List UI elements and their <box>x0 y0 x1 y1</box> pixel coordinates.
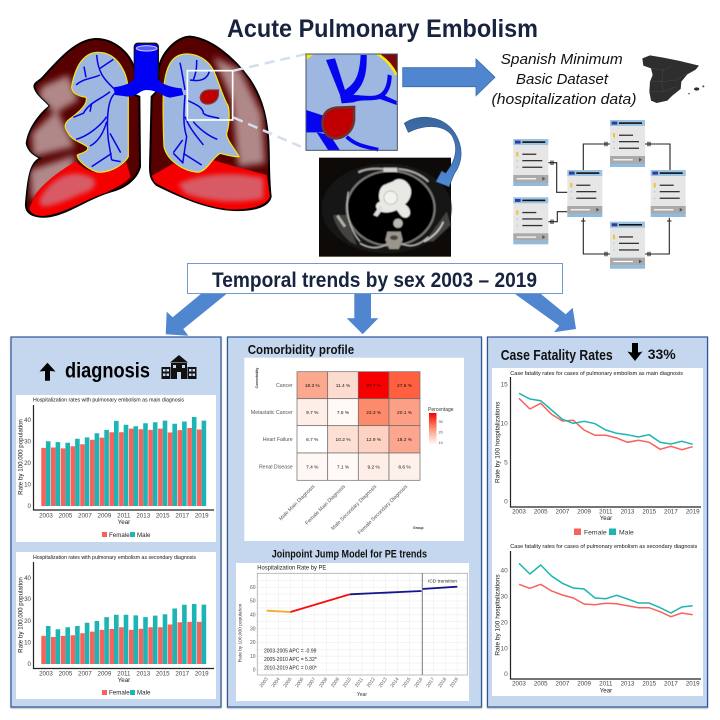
chart: secondary diagnosis hospitalization bars: Female <box>109 690 130 696</box>
chart: comorbidity heatmap: 27.6 % <box>397 383 413 389</box>
chart: secondary diagnosis hospitalization bars: 0 <box>28 661 32 668</box>
chart: main diagnosis hospitalization bars: 2019 <box>195 513 209 520</box>
chart: joinpoint line chart: 2009 <box>330 676 341 689</box>
chart: joinpoint line chart: 30 <box>250 626 256 632</box>
chart: main diagnosis fatality lines: 15 <box>500 382 508 388</box>
chart: secondary diagnosis hospitalization bars: 2015 <box>156 670 170 678</box>
chart: secondary diagnosis fatality lines: 40 <box>500 568 508 574</box>
chart: main diagnosis hospitalization bars: 2005 <box>59 513 73 520</box>
chart: joinpoint line chart: 2018 <box>437 676 448 689</box>
chart: joinpoint line chart: 2015 <box>401 676 413 689</box>
chart: joinpoint line chart: 2008 <box>318 676 329 689</box>
chart: main diagnosis fatality lines: 2013 <box>621 508 635 516</box>
panel: comorbidity and joinpoint <box>228 337 482 707</box>
chart: secondary diagnosis hospitalization bars: 20 <box>24 618 32 625</box>
chart: comorbidity heatmap: 20.1 % <box>397 410 413 416</box>
chart: joinpoint line chart: 60 <box>250 585 256 591</box>
chart: main diagnosis fatality lines: 2005 <box>534 508 548 516</box>
chart: comorbidity heatmap: 7.1 % <box>337 464 350 470</box>
chart: comorbidity heatmap: Cancer <box>276 383 293 389</box>
chart: comorbidity heatmap: 9.2 % <box>368 464 381 470</box>
chart: secondary diagnosis fatality lines: 2007 <box>556 680 570 688</box>
chart: secondary diagnosis fatality lines: 10 <box>500 646 508 652</box>
chart: main diagnosis fatality lines: 2015 <box>642 508 657 516</box>
chart: main diagnosis hospitalization bars: Rate by 100,000 population <box>18 419 25 495</box>
panel: case fatality rates <box>488 337 708 707</box>
chart: secondary diagnosis fatality lines: 2009 <box>577 680 592 688</box>
chart: secondary diagnosis fatality lines: 2015 <box>642 680 657 688</box>
chart: joinpoint line chart: 10 <box>250 654 256 660</box>
chart: joinpoint line chart: 50 <box>250 599 256 605</box>
chart: joinpoint line chart: 2011 <box>354 676 365 689</box>
chart: comorbidity heatmap: Male Secondary Diagnosis <box>330 484 378 532</box>
chart: comorbidity heatmap: Heart Failure <box>263 437 293 443</box>
heading: case fatality rates: Case Fatality Rates <box>501 347 613 364</box>
chart: comorbidity heatmap: Group <box>413 526 424 530</box>
chart: secondary diagnosis fatality lines: 2013 <box>621 680 635 688</box>
chart: main diagnosis fatality lines <box>492 368 703 536</box>
chart: comorbidity heatmap: 9.7 % <box>306 410 319 416</box>
chart: main diagnosis hospitalization bars <box>16 395 216 542</box>
chart: secondary diagnosis fatality lines: 2011 <box>599 680 613 688</box>
icon: map of Spain <box>642 55 704 103</box>
chart: comorbidity heatmap: 30 <box>438 420 443 424</box>
chart: joinpoint line chart: 2006 <box>294 676 306 689</box>
chart: joinpoint line chart: 2017 <box>425 676 436 689</box>
chart: comorbidity heatmap: 7.4 % <box>306 464 319 470</box>
chart: secondary diagnosis hospitalization bars: 30 <box>24 596 32 603</box>
chart: main diagnosis hospitalization bars: 2003 <box>39 513 53 520</box>
chart: comorbidity heatmap: Metastatic Cancer <box>251 410 293 416</box>
chart: comorbidity heatmap: 20 <box>438 430 443 434</box>
chart: joinpoint line chart: 2003 <box>259 676 270 689</box>
right lung <box>150 37 271 210</box>
CT scan image <box>319 158 452 257</box>
chart: main diagnosis fatality lines: Year <box>600 515 612 522</box>
chart: main diagnosis fatality lines: Male <box>619 530 634 536</box>
chart: secondary diagnosis hospitalization bars: 2011 <box>117 670 131 678</box>
chart: secondary diagnosis fatality lines <box>492 536 703 696</box>
chart: secondary diagnosis fatality lines: 2017 <box>664 680 678 688</box>
chart: comorbidity heatmap: 10 <box>438 441 443 445</box>
heading: 33 percent: 33% <box>648 346 676 362</box>
chart: secondary diagnosis fatality lines: 0 <box>504 671 508 678</box>
chart: main diagnosis hospitalization bars: 2007 <box>78 513 92 520</box>
chart: comorbidity heatmap: Male Main Diagnosis <box>278 484 317 522</box>
chart: joinpoint line chart: 2010 <box>342 676 353 689</box>
chart: secondary diagnosis hospitalization bars: 2009 <box>98 670 112 678</box>
chart: main diagnosis hospitalization bars: Year <box>118 519 130 526</box>
chart: main diagnosis hospitalization bars: Hospitalization rates with pulmonary embolism as main diagnosis <box>33 398 184 404</box>
chart: joinpoint line chart: 2003-2005 APC = -0.99 <box>264 649 317 655</box>
chart: comorbidity heatmap: 37.7 % <box>366 383 382 389</box>
chart: secondary diagnosis hospitalization bars: 2019 <box>195 670 209 678</box>
chart: main diagnosis hospitalization bars: 10 <box>24 482 32 488</box>
chart: joinpoint line chart: 2016 <box>413 676 425 689</box>
chart: joinpoint line chart: Hospitalization Rate by PE <box>257 566 326 572</box>
arrow to right panel <box>514 293 576 332</box>
arrow to left panel <box>166 293 227 336</box>
table cards <box>513 139 548 186</box>
chart: comorbidity heatmap <box>244 358 464 541</box>
chart: secondary diagnosis hospitalization bars: 2017 <box>175 670 190 678</box>
chart: secondary diagnosis fatality lines: 2005 <box>534 680 548 688</box>
chart: joinpoint line chart: 2019 <box>449 676 460 689</box>
chart: secondary diagnosis fatality lines: Year <box>600 688 612 694</box>
section heading box: Temporal trends by sex 2003 – 2019 <box>212 269 537 292</box>
chart: secondary diagnosis hospitalization bars <box>16 552 216 699</box>
chart: secondary diagnosis hospitalization bars: 10 <box>24 640 32 646</box>
connectors <box>548 142 672 256</box>
chart: comorbidity heatmap: 11.4 % <box>336 383 351 389</box>
chart: comorbidity heatmap: 18.2 % <box>397 437 413 443</box>
chart: comorbidity heatmap: Comorbidity <box>255 368 259 388</box>
chart: joinpoint line chart: Year <box>357 692 367 698</box>
chart: comorbidity heatmap: Female Main Diagnosis <box>304 484 347 526</box>
chart: secondary diagnosis fatality lines: 30 <box>500 594 508 600</box>
icon: down arrow <box>628 343 642 361</box>
chart: main diagnosis hospitalization bars: 2013 <box>136 513 151 520</box>
chart: main diagnosis fatality lines: Female <box>584 530 607 536</box>
chart: secondary diagnosis hospitalization bars: 2003 <box>39 670 53 678</box>
zoom selection box <box>187 71 233 120</box>
chart: secondary diagnosis hospitalization bars: Rate by 100,000 population <box>18 577 25 653</box>
heading: diagnosis: diagnosis <box>65 360 150 382</box>
dataset label: Spanish Minimum <box>501 51 623 68</box>
chart: main diagnosis hospitalization bars: 2017 <box>175 513 190 520</box>
chart: comorbidity heatmap: Female Secondary Diagnosis <box>357 484 409 536</box>
chart: main diagnosis hospitalization bars: 2009 <box>98 513 112 520</box>
chart: secondary diagnosis hospitalization bars: Hospitalization rates with pulmonary embolism as secondary diagnosis <box>33 555 196 561</box>
chart: main diagnosis hospitalization bars: 30 <box>24 438 32 446</box>
chart: joinpoint line chart: 20 <box>250 640 256 646</box>
chart: joinpoint line chart: 2012 <box>366 676 377 689</box>
chart: main diagnosis fatality lines: 2003 <box>512 508 526 516</box>
panel: diagnosis <box>11 337 221 707</box>
chart: main diagnosis hospitalization bars: Female <box>109 532 130 539</box>
chart: secondary diagnosis hospitalization bars: Male <box>137 690 151 696</box>
chart: main diagnosis fatality lines: 2009 <box>577 508 592 516</box>
ER database diagram <box>513 120 686 269</box>
chart: main diagnosis fatality lines: Rate by 100 hospitalizations <box>494 401 502 483</box>
chart: main diagnosis fatality lines: 2017 <box>664 508 678 516</box>
chart: comorbidity heatmap: 6.7 % <box>306 437 319 443</box>
chart: joinpoint line chart: 2007 <box>306 676 317 689</box>
title: Acute Pulmonary Embolism <box>227 15 538 43</box>
icon: hospital <box>162 355 196 379</box>
curved arrow to CT scan <box>404 117 461 187</box>
chart: joinpoint line chart: 2013 <box>378 676 389 689</box>
chart: comorbidity heatmap: 7.5 % <box>337 410 350 416</box>
dataset label: (hospitalization data) <box>492 91 636 108</box>
chart: comorbidity heatmap: Percentage <box>428 407 454 413</box>
chart: joinpoint line chart: 2010-2019 APC = 0.80* <box>264 665 317 671</box>
pulmonary clot <box>200 90 218 104</box>
left lung <box>26 39 140 217</box>
chart: secondary diagnosis hospitalization bars: 2007 <box>78 670 92 678</box>
chart: main diagnosis fatality lines: 0 <box>504 498 508 506</box>
dataset label: Basic Dataset <box>516 71 609 88</box>
trachea and bronchi <box>113 43 183 98</box>
chart: main diagnosis fatality lines: 2011 <box>599 508 613 516</box>
dataset label <box>492 51 636 108</box>
chart: joinpoint line chart: 2004 <box>271 676 282 689</box>
chart: comorbidity heatmap: 18.3 % <box>305 383 321 389</box>
chart: main diagnosis fatality lines: Case fatality rates for cases of pulmonary embolism as main diagnosis <box>510 371 683 377</box>
chart: main diagnosis hospitalization bars: Male <box>137 532 151 539</box>
chart: secondary diagnosis hospitalization bars: 40 <box>24 575 32 582</box>
lungs illustration <box>26 37 271 217</box>
arrow to middle panel <box>347 293 378 334</box>
chart: joinpoint line chart: 40 <box>250 612 256 618</box>
chart: secondary diagnosis hospitalization bars: 2013 <box>136 670 151 678</box>
chart: main diagnosis hospitalization bars: 0 <box>28 503 32 510</box>
chart: joinpoint line chart: ICD transition <box>428 578 457 584</box>
chart: main diagnosis fatality lines: 2019 <box>686 508 700 516</box>
chart: main diagnosis fatality lines: 5 <box>504 460 508 466</box>
chart: comorbidity heatmap: 12.9 % <box>366 437 382 443</box>
zoom dashed lines <box>234 54 306 147</box>
icon: up arrow <box>40 363 56 381</box>
arrow to dataset <box>403 59 495 96</box>
chart: joinpoint line chart: 2014 <box>390 676 401 689</box>
chart: secondary diagnosis fatality lines: Rate by 100 hospitalizations <box>494 574 502 656</box>
chart: secondary diagnosis fatality lines: 20 <box>500 620 508 626</box>
heading: joinpoint model: Joinpoint Jump Model for PE trends <box>272 549 427 561</box>
chart: secondary diagnosis hospitalization bars: Year <box>118 677 130 684</box>
chart: main diagnosis hospitalization bars: 40 <box>24 417 32 424</box>
chart: joinpoint line chart <box>236 563 469 701</box>
chart: comorbidity heatmap: 8.6 % <box>398 464 411 470</box>
chart: secondary diagnosis fatality lines: Case fatality rates for cases of pulmonary embolism as secondary diagnosis <box>510 544 697 550</box>
chart: secondary diagnosis fatality lines: 2003 <box>512 680 526 688</box>
inset: zoomed clot <box>306 54 397 150</box>
chart: secondary diagnosis fatality lines: 2019 <box>686 680 700 688</box>
chart: joinpoint line chart: Rate by 100,000 population <box>238 603 244 662</box>
chart: main diagnosis hospitalization bars: 2015 <box>156 513 170 520</box>
chart: joinpoint line chart: 2005-2010 APC = 5.32* <box>264 657 317 663</box>
chart: comorbidity heatmap: 10.2 % <box>336 437 351 443</box>
chart: joinpoint line chart: 2005 <box>282 676 294 689</box>
chart: main diagnosis fatality lines: 10 <box>500 420 508 428</box>
chart: main diagnosis fatality lines: 2007 <box>556 508 570 516</box>
chart: secondary diagnosis hospitalization bars: 2005 <box>59 670 73 678</box>
chart: comorbidity heatmap: Renal Disease <box>259 464 293 470</box>
chart: main diagnosis hospitalization bars: 20 <box>24 460 32 467</box>
chart: joinpoint line chart: 0 <box>253 668 256 674</box>
heading: comorbidity profile: Comorbidity profile <box>248 343 354 357</box>
chart: comorbidity heatmap: 23.3 % <box>366 410 382 416</box>
chart: main diagnosis hospitalization bars: 2011 <box>117 513 131 520</box>
